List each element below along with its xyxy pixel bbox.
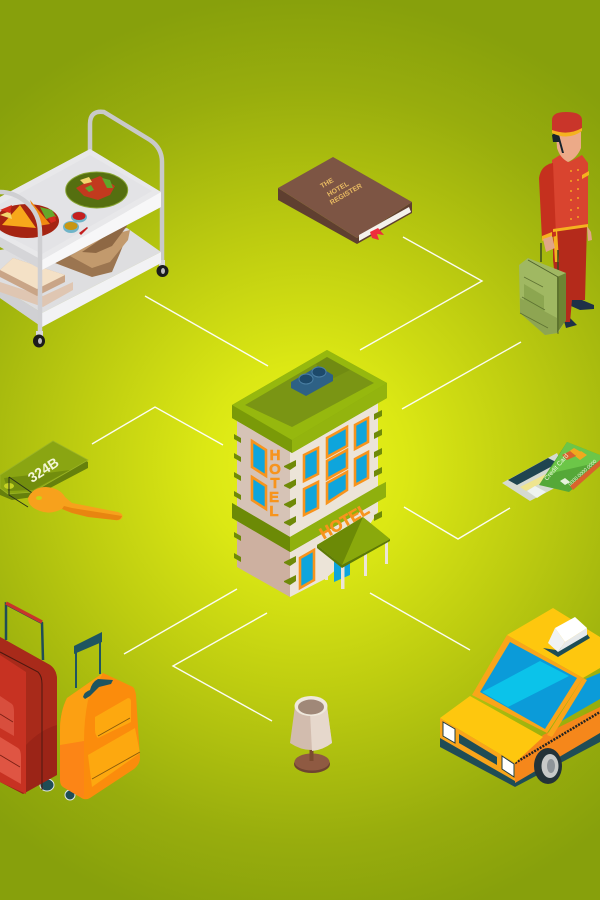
vertical hotel sign: T: [270, 475, 280, 492]
credit cards: [502, 442, 600, 501]
wheel: [534, 748, 562, 784]
bookmark: [370, 228, 384, 240]
sauce bowls: [63, 212, 88, 235]
table lamp: [290, 696, 332, 773]
grey card: [502, 453, 570, 501]
upper floor walls: [237, 395, 378, 540]
red body: [0, 637, 57, 794]
hand right: [587, 226, 592, 241]
key tag: [0, 441, 88, 500]
left arm: [539, 163, 556, 240]
head: [556, 132, 581, 162]
room key with tag: [0, 441, 122, 520]
taxi roof: [507, 608, 600, 678]
taxi side body: [515, 707, 600, 787]
stacked boxes: [0, 258, 73, 307]
grille: [459, 734, 497, 765]
lamp base: [294, 755, 330, 773]
green card: Credit Card: [543, 452, 571, 482]
pizza boxes: [55, 222, 130, 277]
vertical hotel sign: E: [269, 489, 279, 506]
back handle: [90, 112, 162, 262]
book pages: [359, 207, 411, 241]
side window: [560, 673, 600, 722]
book title: HOTEL: [326, 180, 351, 199]
service trolley: [0, 112, 168, 348]
front caster: [33, 331, 45, 348]
hand: [543, 236, 555, 252]
headlights: [443, 722, 455, 743]
windows: [252, 418, 368, 588]
hood: [440, 696, 543, 763]
band between floors: [232, 482, 386, 552]
key ring: [9, 477, 40, 507]
green card: [539, 442, 600, 492]
book title: REGISTER: [329, 183, 364, 207]
room number: 324B: [25, 454, 62, 486]
green card: 0000 0000 0000: [567, 459, 598, 487]
trousers: [553, 224, 587, 322]
book spine and cover: [278, 188, 412, 244]
lower floor walls: [237, 495, 378, 597]
book title: THE: [319, 177, 335, 190]
green suitcase: [519, 243, 566, 335]
front bumper: [440, 718, 515, 787]
wall bricks: [234, 410, 382, 585]
vertical hotel sign: H: [270, 447, 280, 464]
orange handle: [74, 632, 102, 688]
jacket buttons: [570, 169, 579, 220]
samosa plate: [0, 200, 59, 238]
connector lines: [92, 237, 521, 721]
red pockets: [0, 696, 14, 736]
windshield glass: [480, 642, 577, 729]
lamp stem: [310, 748, 314, 761]
vertical hotel sign: L: [269, 503, 279, 520]
key: [28, 487, 122, 520]
front handle: [0, 192, 40, 333]
red handle: [6, 604, 43, 660]
orange suitcase: [60, 632, 140, 800]
shoes: [571, 299, 594, 310]
jacket: [552, 155, 588, 231]
top grip: [83, 679, 113, 699]
lower shelf: [0, 228, 161, 327]
entrance hotel sign: HOTEL: [317, 501, 373, 543]
curry plate: [66, 172, 128, 208]
windshield frame: [472, 635, 583, 733]
wheel: [65, 790, 75, 800]
lamp shade: [290, 706, 332, 750]
pockets: [95, 698, 131, 738]
top shelf: [0, 149, 161, 270]
cap: [552, 112, 582, 135]
red suitcase: [0, 603, 57, 794]
hotel building: [232, 350, 390, 597]
back caster: [156, 260, 168, 277]
rooftop AC unit: [291, 366, 333, 396]
hotel register book: [278, 157, 412, 244]
wheel: [40, 779, 54, 791]
roof: [232, 350, 387, 453]
orange body: [60, 673, 140, 799]
vertical hotel sign: O: [269, 461, 281, 478]
entrance canopy: [317, 517, 390, 589]
book title: [319, 177, 364, 207]
taxi: [440, 608, 600, 787]
roof sign: [543, 617, 590, 657]
bellboy: [519, 112, 594, 335]
